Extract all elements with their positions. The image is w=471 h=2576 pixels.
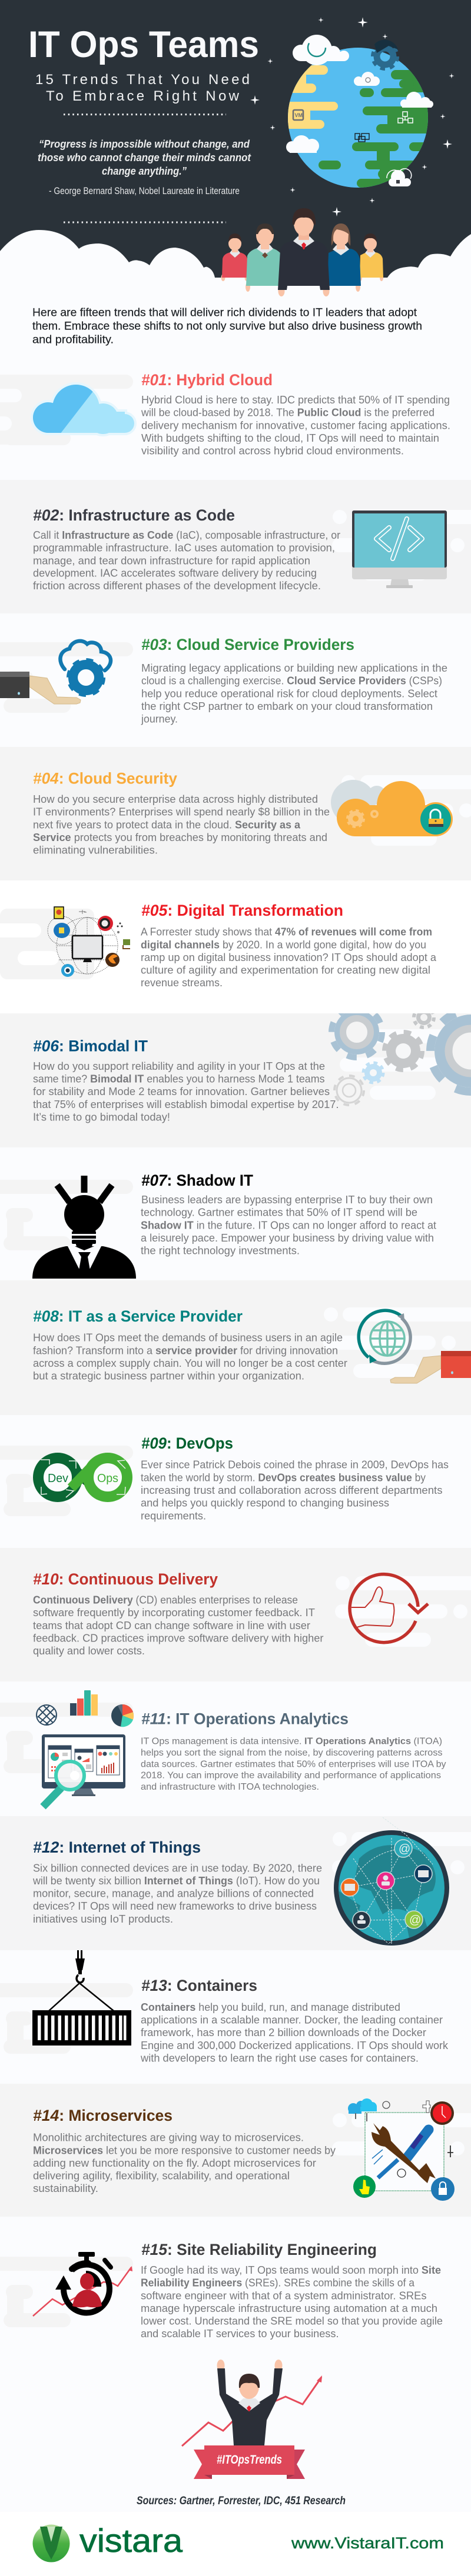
heading: #13: Containers [141,1977,257,1994]
heading: #07: Shadow IT [141,1172,253,1189]
panel: footer [0,2512,471,2576]
body text: Continuous Delivery (CD) enables enterprises to release [33,1594,298,1606]
heading: #05: Digital Transformation [141,902,343,919]
panel: #05 Digital Transformation [0,880,471,1013]
body text: Reliability Engineers (SREs). SREs combine the skills of a [141,2277,415,2289]
label Dev: Dev [48,1472,68,1485]
heading: #04: Cloud Security [33,770,177,788]
icon: analytics dashboard [37,1690,134,1807]
lock cloud [389,170,411,186]
icon: cloud [29,382,138,435]
heading: #10: Continuous Delivery [33,1570,218,1588]
body text: and scalable IT services to your business. [141,2328,339,2340]
body text [33,1332,347,1382]
pie chart [111,1704,134,1727]
subtitle: 15 Trends That You Need [35,72,250,88]
quote: those who cannot change their minds cannot [38,151,251,163]
small clouds [286,72,433,153]
body text: How do you support reliability and agility in your IT Ops at the [33,1060,325,1072]
body text: and infrastructure with ITOA technologies. [141,1782,319,1792]
body text: friction across different phases of the development lifecycle. [33,580,321,592]
heading: #09: DevOps [141,1434,233,1452]
icon: container on a crane hook [32,1950,131,2046]
body text: IT environments? Enterprises will spend nearly $8 billion in the [33,806,330,818]
title: IT Ops Teams [28,24,259,65]
icon: hand holding cloud gear [0,641,111,704]
at sign green: @ [409,1914,421,1927]
body text [141,394,450,457]
panel: #06 Bimodal IT [0,1007,471,1147]
monitor [42,1734,125,1796]
panel: #10 Continuous Delivery [0,1548,471,1681]
body text [33,529,340,592]
person: blue sweater [327,223,361,292]
panel: #11 IT Operations Analytics [0,1690,446,1807]
heading: #02: Infrastructure as Code [33,506,235,524]
body text: ramp up on digital business innovation? IT Ops should adopt a [141,952,437,963]
icon: digital globe with apps [48,907,130,977]
website: www.VistaraIT.com [291,2534,444,2552]
body text: Microservices let you be more responsive to customer needs by [33,2144,336,2156]
subtitle [35,72,250,104]
body text [32,1862,322,1925]
body text: that 75% of enterprises will establish bimodal expertise by 2017. [33,1099,339,1110]
body text: software frequently by incorporating customer feedback. IT [33,1607,315,1619]
body text: monitor, secure, manage, and analyze billions of connected [33,1888,314,1900]
body text: across a complex supply chain. You will no longer be a cost center [33,1357,347,1369]
icon: stopwatch with person and trend line [33,2252,132,2316]
intro text [32,307,422,346]
body text: revenue streams. [141,977,223,989]
icon: man with light-bulb head [32,1176,136,1279]
icon: cloud with padlock [331,780,453,836]
body text: It’s time to go bimodal today! [33,1111,170,1123]
banner [194,2445,305,2479]
body text: How does IT Ops meet the demands of business users in an agile [33,1332,343,1344]
body text: help you reduce operational risk for cloud deployments. Select [141,688,437,699]
body text: delivery mechanism for innovative, customer facing applications. [141,419,450,431]
heading: #11: IT Operations Analytics [141,1710,349,1728]
body text [141,926,437,989]
body text: Containers help you build, run, and manage distributed [141,2001,400,2013]
icon: cluster of gears [331,1007,471,1105]
body text [141,1737,446,1792]
body text: the right technology investments. [141,1244,300,1256]
body text: Business leaders are bypassing enterprise IT to buy their own [141,1194,433,1206]
icon: connected globe [334,1817,449,1946]
body text: applications in a scalable manner. Docker, the leading container [141,2014,443,2026]
panel: #12 Internet of Things [0,1816,471,1950]
panel: #09 DevOps [0,1434,449,1521]
sources: Sources: Gartner, Forrester, IDC, 451 Research [137,2495,346,2507]
body text: cloud is a challenging exercise. Cloud Service Providers (CSPs) [141,675,442,687]
icon: DevOps infinity loop [38,1458,127,1497]
VM chip [293,110,303,120]
icon: monitor with code symbol [352,510,447,588]
body text: feedback. CD practices improve software delivery with higher [33,1633,324,1644]
body text: digital channels by 2020. In a world gone digital, how do you [141,939,426,950]
illustration: man celebrating with trend line [182,2360,322,2479]
logo wordmark: vistara [79,2522,183,2559]
person: teal sweater [246,223,280,292]
body text: will be twenty six billion Internet of Things (IoT). How do you [32,1875,320,1887]
label Ops: Ops [97,1472,118,1485]
body text [33,1060,339,1123]
quote: “Progress is impossible without change, and [39,138,250,150]
body text: framework, has more than 2 billion downloads of the Docker [141,2027,426,2038]
body text: lower cost. Understand the SRE model so that you provide agile [141,2315,443,2327]
person: yellow sweater [359,233,383,281]
stars [250,17,455,216]
body text: requirements. [141,1510,206,1521]
body text: next five years to protect data in the cloud. Security as a [33,819,301,830]
heading: #01: Hybrid Cloud [141,371,273,389]
body text [141,1194,436,1256]
body text: manage hyperscale infrastructure using automation at a much [141,2303,437,2314]
intro text: them. Embrace these shifts to not only survive but also drive business growth [32,320,422,333]
body text: quality and lower costs. [33,1645,145,1657]
network nodes [341,1840,432,1929]
body text: A Forrester study shows that 47% of revenues will come from [141,926,432,938]
magnifying glass [43,1761,84,1807]
bar chart [70,1690,98,1716]
intro text: and profitability. [32,334,114,346]
at sign: @ [399,1843,410,1856]
subtitle: To Embrace Right Now [46,88,240,104]
panel: #03 Cloud Service Providers [0,636,447,725]
quote attribution: - George Bernard Shaw, Nobel Laureate in Literature [49,186,240,196]
heading: #06: Bimodal IT [33,1037,148,1055]
body text [141,662,447,725]
illustration: team of five [221,208,383,296]
body text: How do you secure enterprise data across highly distributed [33,793,318,805]
panel: #04 Cloud Security [0,747,471,880]
body text: a leisurely pace. Empower your business by driving value with [141,1232,434,1244]
body text: software engineer with that of a system administrator. SREs [141,2290,426,2301]
body text: Shadow IT in the future. IT Ops can no longer afford to react at [141,1219,436,1231]
body text: IT Ops management is data intensive. IT Operations Analytics (ITOA) [141,1737,442,1747]
body text [141,1459,449,1521]
panel: #14 Microservices [0,2084,471,2217]
body text [33,793,330,856]
body text: development. IAC accelerates software delivery by reducing [33,568,317,579]
heading: #12: Internet of Things [33,1838,201,1856]
body text: and helps you quickly respond to changing business [141,1497,389,1509]
body text: adding new functionality on the fly. Adopt microservices for [33,2157,316,2169]
body text: journey. [141,713,178,725]
heading: #14: Microservices [33,2107,173,2124]
body text: If Google had its way, IT Ops teams would soon morph into Site [141,2264,441,2276]
panel: #15 Site Reliability Engineering [0,2241,443,2340]
body text: with developers to learn the right use cases for containers. [140,2052,419,2064]
heading: #15: Site Reliability Engineering [141,2241,377,2258]
body text: taken the world by storm. DevOps creates business value by [141,1471,426,1483]
body text: for stability and Mode 2 teams for innovation. Gartner believes [33,1086,330,1097]
body text [140,2001,449,2064]
body text: With budgets shifting to the cloud, IT Ops will need to maintain [141,432,439,444]
illustration: planet with clouds [277,35,439,188]
panel: header [0,0,471,296]
panel: #02 Infrastructure as Code [0,480,471,613]
body text: Migrating legacy applications or building new applications in the [141,662,447,674]
panel: #13 Containers [0,1950,449,2064]
body text: technology. Gartner estimates that 50% of IT spend will be [141,1207,417,1219]
body text: Engine and 300,000 Dockerized applications. IT Ops should work [141,2040,449,2051]
body text: programmable infrastructure. IaC uses automation to provision, [33,542,335,554]
body text: Call it Infrastructure as Code (IaC), composable infrastructure, or [33,529,340,541]
body text: Six billion connected devices are in use today. By 2020, there [33,1862,322,1874]
device glyph [355,134,369,142]
intro text: Here are fifteen trends that will deliver rich dividends to IT leaders that adopt [32,307,417,319]
body text [33,1594,324,1657]
cloud with ring [293,35,349,65]
body text: Monolithic architectures are giving way to microservices. [33,2132,304,2144]
body text [33,2132,336,2194]
body text: sustainability. [33,2183,98,2194]
body text: but a strategic business partner within your organization. [33,1370,304,1382]
icon: hand with rotating globe [359,1310,471,1383]
panel: #01 Hybrid Cloud [0,371,450,457]
panel: #08 IT as a Service Provider [0,1280,471,1415]
illustration: planet with clouds: VM [294,112,303,118]
body text: Service protects you from breaches by monitoring threats and [33,832,327,843]
heading: #03: Cloud Service Providers [141,636,354,653]
body text: culture of agility and experimentation for creating new digital [141,965,430,976]
body text: helps you sort the signal from the noise, by discovering patterns across [141,1748,443,1758]
body text: teams that adopt CD can change software in line with user [33,1620,310,1631]
body text: devices? IT Ops will need new frameworks to drive business [33,1900,317,1912]
icon: wrench and screwdriver toolkit [348,2098,455,2201]
globe [37,1705,57,1725]
quote [38,138,251,177]
body text: delivering agility, flexibility, scalability, and operational [33,2170,290,2182]
body text: will be cloud-based by 2018. The Public Cloud is the preferred [141,407,434,419]
icon: thumbs up in circular arrow [350,1574,428,1643]
heading: #08: IT as a Service Provider [33,1307,243,1325]
hashtag: #ITOpsTrends [217,2453,282,2467]
quote: change anything.” [102,165,187,177]
network glyph [398,112,413,123]
body text [141,2264,443,2340]
gear on the planet [373,44,397,69]
body text: the right CSP partner to embark on your cloud transformation [141,700,433,712]
body text: initiatives using IoT products. [33,1913,173,1925]
body text: increasing trust and collaboration across different departments [141,1484,443,1496]
body text: data sources. Gartner estimates that 50% of enterprises will use ITOA by [141,1759,446,1769]
body text: 2018. You can improve the availability and performance of applications [141,1771,441,1781]
body text: visibility and control across hybrid cloud environments. [141,445,404,457]
person: centre man in dark suit [278,208,330,296]
cloud band at the bottom of the header [0,230,471,288]
panel: #07 Shadow IT [0,1172,436,1279]
body text: Ever since Patrick Debois coined the phrase in 2009, DevOps has [141,1459,449,1471]
logo mark [33,2524,69,2562]
body text: same time? Bimodal IT enables you to harness Mode 1 teams [33,1073,325,1085]
body text: Hybrid Cloud is here to stay. IDC predicts that 50% of IT spending [141,394,450,406]
person: red sweater [221,233,248,281]
body text: eliminating vulnerabilities. [33,845,158,856]
body text: manage, and tear down infrastructure for rapid application [33,555,310,566]
body text: fashion? Transform into a service provider for driving innovation [33,1344,338,1356]
